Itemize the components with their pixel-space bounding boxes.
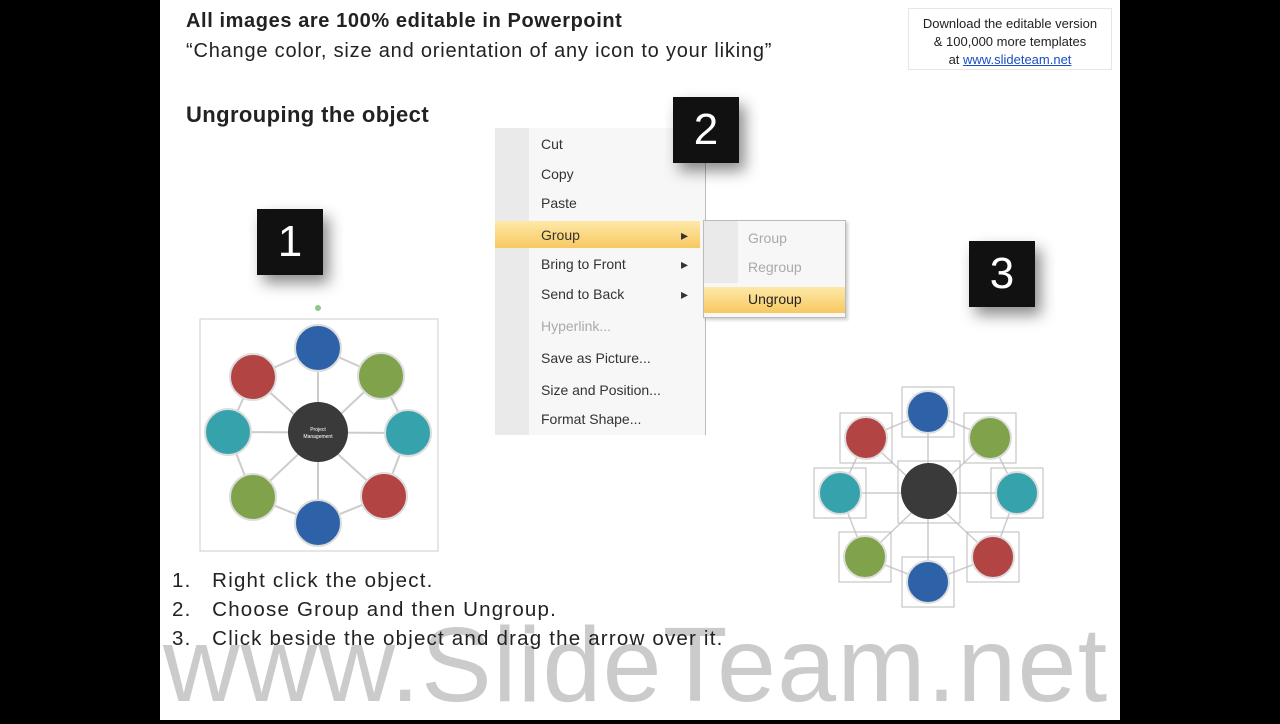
download box: & 100,000 more templates: [934, 34, 1086, 49]
context menu: Cut: [541, 136, 563, 152]
diagram 1: Project: [310, 427, 326, 433]
context menu: Group: [541, 227, 580, 243]
number box 2: [673, 97, 739, 163]
context menu: [495, 128, 706, 435]
context menu: Bring to Front: [541, 256, 626, 272]
diagram 3: [814, 386, 1044, 608]
steps list: [172, 569, 723, 650]
number box 3: [969, 241, 1035, 307]
number box 1: 1: [278, 217, 302, 266]
heading text: “Change color, size and orientation of any icon to your liking”: [186, 40, 772, 62]
section title: Ungrouping the object: [186, 102, 429, 127]
steps list: 3. Click beside the object and drag the arrow over it.: [172, 627, 723, 650]
submenu: Group: [748, 230, 787, 246]
download box: at www.slideteam.net: [949, 52, 1071, 67]
watermark: www.SlideTeam.net: [163, 606, 1108, 724]
context menu: Paste: [541, 195, 577, 211]
heading text: All images are 100% editable in Powerpoint: [186, 10, 622, 32]
download box: [908, 8, 1112, 70]
context menu: Copy: [541, 166, 574, 182]
context menu: Size and Position...: [541, 382, 661, 398]
submenu: [703, 220, 846, 318]
steps list: 2. Choose Group and then Ungroup.: [172, 598, 557, 621]
white slide area: [160, 0, 1120, 720]
context menu: Send to Back: [541, 286, 624, 302]
submenu: Ungroup: [748, 291, 802, 307]
group highlight: [495, 221, 700, 248]
context menu: ▸: [681, 227, 688, 243]
number box 2: 2: [694, 105, 718, 154]
number box 1: [257, 209, 323, 275]
heading text: [186, 10, 772, 62]
context menu: Save as Picture...: [541, 350, 651, 366]
context menu: ▸: [681, 286, 688, 302]
number box 3: 3: [990, 249, 1014, 298]
context menu: Format Shape...: [541, 411, 641, 427]
diagram 1: Management: [303, 434, 333, 440]
context menu: ▸: [681, 256, 688, 272]
diagram 1: [200, 305, 438, 552]
context menu: Hyperlink...: [541, 318, 611, 334]
download box: Download the editable version: [923, 16, 1097, 31]
submenu: Regroup: [748, 259, 802, 275]
steps list: 1. Right click the object.: [172, 569, 433, 592]
